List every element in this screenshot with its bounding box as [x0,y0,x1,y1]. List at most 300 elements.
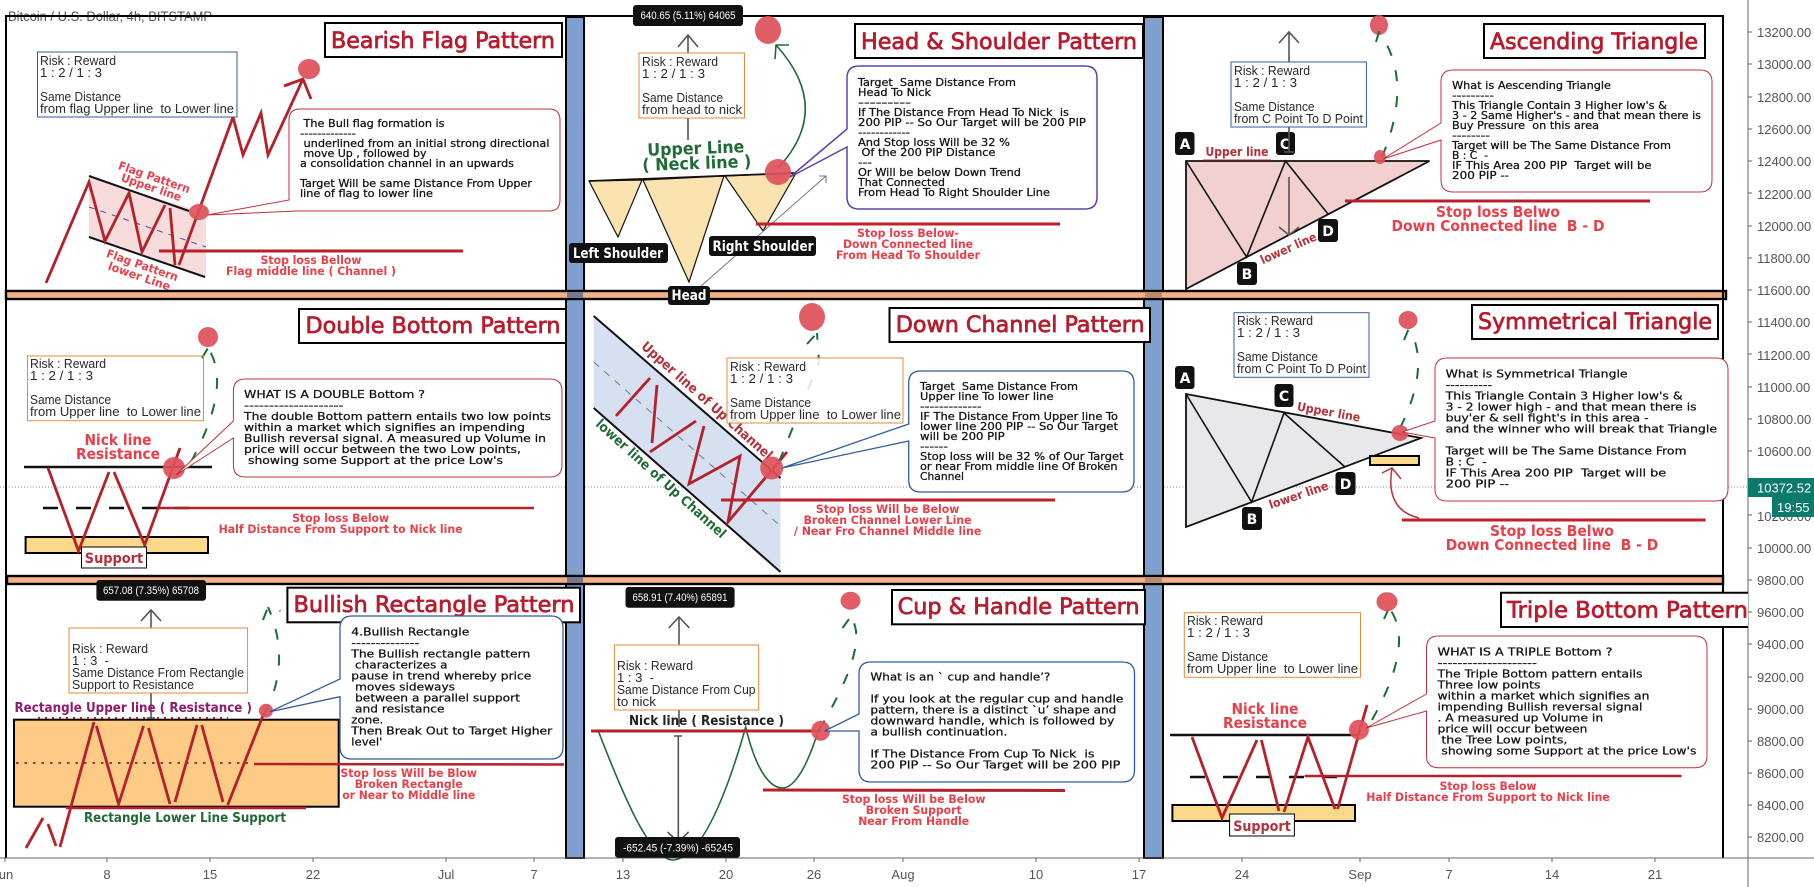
callout [824,662,1134,782]
triangle labels: Upper line [1296,399,1361,425]
stop loss [159,508,534,536]
stop loss [763,790,1065,828]
channel [594,316,780,572]
measure badge bottom [615,837,740,858]
support label: Support [85,551,144,567]
panel: head and shoulder pattern [569,5,1143,305]
time axis: 21 [1648,867,1662,882]
callout: lower line 200 PIP -- So Our Target [920,421,1118,433]
risk reward box: Risk : Reward [72,641,148,656]
triangle labels: Upper line [1206,145,1268,159]
callout: If The Distance From Head To Nick is [858,107,1069,119]
time axis: 15 [203,867,217,882]
callout: ------------- [300,128,356,140]
nick line label: Nick line [1232,700,1298,718]
callout [1366,636,1707,768]
price axis: 9400.00 [1757,637,1804,652]
risk reward box: to nick [617,694,657,709]
point badges: B [1242,267,1252,283]
price axis: 9600.00 [1757,605,1804,620]
callout: The Bull flag formation is [302,118,444,130]
target marker [298,59,320,79]
grey trend arrow [700,176,826,287]
nick line label: Nick line [84,431,152,449]
callout: ---------- [1446,378,1492,392]
risk reward box: Same Distance [642,90,723,105]
time axis: Aug [891,867,915,882]
callout: This Triangle Contain 3 Higher low's & [1451,100,1667,112]
callout: a consolidation channel in an upwards [300,158,514,170]
support label [1230,814,1294,836]
panel: cup and handle pattern [591,587,1145,860]
dashed target arrow [819,617,861,730]
title: Down Channel Pattern [896,312,1145,338]
current price label [1748,478,1814,517]
stop loss: Down Connected line [843,237,973,251]
risk reward box: from C Point To D Point [1234,111,1363,126]
risk reward box: Risk : Reward [1237,313,1313,328]
risk reward box [1234,313,1369,377]
callout: between a parallel support [355,692,521,704]
support box [1370,456,1419,465]
callout: 200 PIP -- [1446,478,1509,490]
price axis: 9000.00 [1757,702,1804,717]
dashed target arrow [779,333,827,462]
callout: ------------- [920,401,982,413]
price path [1192,705,1367,818]
breakout marker [1349,720,1369,740]
title: Symmetrical Triangle [1478,309,1712,335]
channel labels: Upper line [119,170,184,204]
callout: IF This Area 200 PIP Target will be [1452,160,1652,172]
point badges [1175,366,1356,530]
price path [616,378,787,522]
callout: 200 PIP -- So Our Target will be 200 PIP [858,117,1086,129]
callout: IF The Distance From Upper line To [920,411,1118,423]
time axis [0,858,1662,882]
risk reward box: 1 : 3 - [72,653,109,668]
target marker [1370,15,1388,35]
time axis: Sep [1348,867,1372,882]
time axis: 7 [530,867,538,882]
shoulder labels [569,236,816,305]
callout: The Triple Bottom pattern entails [1436,668,1643,680]
callout: --------- [858,97,911,109]
price axis: 12600.00 [1757,122,1811,137]
callout: showing some Support at the price Low's [248,454,503,467]
risk reward box: Risk : Reward [642,54,718,69]
stop loss: Stop loss Below- [857,226,959,240]
callout: 200 PIP -- So Our Target will be 200 PIP [870,758,1121,772]
red curved arrow [1382,468,1419,518]
callout: If The Distance From Cup To Nick is [870,748,1095,760]
target marker [799,303,825,331]
callout: What is Symmetrical Triangle [1446,368,1628,380]
callout: level' [351,736,382,748]
callout: -------------------- [1438,656,1537,670]
risk reward box: Risk : Reward [730,359,806,374]
measure badge [633,5,743,26]
callout [207,109,560,215]
neck line label [642,137,752,176]
risk reward box: 1 : 2 / 1 : 3 [730,371,793,386]
dashed target arrow [191,348,221,462]
support label: Support [1233,819,1291,835]
measure badge [96,580,206,601]
callout: buy'er & sell fight's in this area - [1446,412,1649,424]
breakout marker [1374,150,1386,164]
callout: downward handle, which is followed by [870,714,1115,728]
measure badge top: 658.91 (7.40%) 65891 [632,592,728,604]
triangle [1186,394,1421,527]
callout: And Stop loss Will be 32 % [858,137,1010,149]
price path [48,448,180,551]
risk reward box [1184,613,1360,677]
callout: Stop loss will be 32 % of Our Target [920,451,1124,463]
risk reward box [28,356,204,421]
callout: Target Same Distance From [919,381,1078,393]
callout: Then Break Out to Target Higher [350,724,553,738]
time axis: 22 [306,867,320,882]
stop loss: Stop loss Will be Below [842,792,986,806]
time axis: 24 [1235,867,1249,882]
nick line label [76,431,160,463]
callout: --------- [1452,90,1494,102]
point badges: A [1180,371,1191,387]
callout: ------ [920,441,948,453]
time axis: 8 [103,867,111,882]
breakout marker [259,704,273,718]
callout: or near From middle line Of Broken [920,461,1118,473]
nick line [591,730,821,732]
callout: -------------------- [244,399,344,412]
callout: Three low points [1436,678,1541,692]
callout: within a market which signifies an impending [244,421,525,434]
risk reward box: from Upper line to Lower line [730,407,901,422]
price axis: 8600.00 [1757,766,1804,781]
callout: --- [858,157,872,169]
measure badge top [626,587,735,608]
callout: If you look at the regular cup and handle [870,692,1124,706]
panel: down channel pattern [592,303,1150,572]
callout: -------- [1452,130,1490,142]
risk reward box: 1 : 2 / 1 : 3 [1237,325,1300,340]
price axis: 11600.00 [1757,283,1810,298]
risk reward box: 1 : 2 / 1 : 3 [1234,75,1297,90]
callout: 4.Bullish Rectangle [351,626,470,638]
dashed target arrow [1376,32,1397,157]
target arrow [775,45,805,167]
price axis: 10600.00 [1757,444,1811,459]
triangle labels [1267,399,1361,512]
callout: What is an ` cup and handle’? [870,670,1051,684]
risk reward box: Same Distance [30,392,111,407]
callout: -------------- [351,636,419,650]
risk reward box: from flag Upper line to Lower line [40,101,234,116]
channel labels: Flag Pattern [117,158,192,196]
callout: Target Will be same Distance From Upper [299,178,533,190]
channel labels: Upper line of Up Channel [638,339,776,463]
triangle labels: lower line [1267,479,1330,512]
nick line label: Resistance [1223,714,1307,732]
stop loss: Near From Handle [858,814,969,828]
risk reward box: Risk : Reward [40,53,116,68]
panel: triple bottom pattern [1170,592,1748,836]
callout: within a market which signifies an [1438,690,1650,702]
risk reward box: Risk : Reward [1234,63,1310,78]
stop loss [756,224,1060,262]
breakout marker [811,721,830,741]
callout: The double Bottom pattern entails two low points [243,410,551,423]
callout: ------------ [858,127,910,139]
callout [1402,358,1728,501]
risk reward box: from Upper line to Lower line [1187,661,1358,676]
risk reward box: from C Point To D Point [1237,361,1366,376]
risk reward box: Same Distance [730,395,811,410]
breakout marker [163,457,185,479]
callout: underlined from an initial strong directional [304,138,550,150]
callout: What is Aescending Triangle [1452,80,1611,92]
callout: move Up , followed by [304,148,426,160]
triangle labels: lower line [1258,230,1319,267]
callout: Buy Pressure on this area [1452,120,1599,132]
risk reward box: Risk : Reward [30,356,106,371]
target marker [1376,592,1398,611]
callout: showing some Support at the price Low's [1441,744,1697,758]
callout: Target Same Distance From [857,77,1016,89]
channel labels [105,158,192,293]
target marker [198,327,218,347]
current price label: 19:55 [1777,500,1810,515]
neck line label: Upper Line [647,137,745,161]
chart header: Bitcoin / U.S. Dollar, 4h, BITSTAMP [8,8,212,24]
risk reward box: from Upper line to Lower line [30,404,201,419]
price axis: 9800.00 [1757,573,1804,588]
callout: line of flag to lower line [300,188,433,200]
target marker [840,592,860,610]
price path arrow [46,79,311,283]
time axis: 10 [1029,867,1043,882]
price axis: 10800.00 [1757,412,1811,427]
channel labels [592,339,776,542]
stop loss: or Near to Middle line [342,788,475,802]
support zone [1172,805,1355,821]
title: Double Bottom Pattern [306,313,560,339]
flag channel [89,176,206,277]
price axis: 11800.00 [1757,251,1810,266]
callout: and resistance [355,702,445,716]
stop loss: Broken Support [866,803,962,817]
title: Bullish Rectangle Pattern [294,592,574,618]
callout: Head To Nick [858,87,932,99]
callout: B : C - [1446,456,1487,468]
neckline and half distance [24,467,212,508]
risk reward box [1231,62,1366,127]
point badges: B [1247,512,1257,528]
point badges: D [1340,477,1351,493]
stop loss [1402,520,1706,554]
callout: price will occur between the two Low points, [244,443,521,456]
dashed target arrow [1372,608,1402,720]
stop loss [721,500,1055,538]
channel labels: lower line of Up Channel [592,416,729,542]
price axis: 9200.00 [1757,670,1804,685]
point badges: A [1180,137,1191,153]
shoulder labels: Right Shoulder [712,239,814,255]
callout: will be 200 PIP [920,431,1005,443]
price axis: 11000.00 [1757,380,1810,395]
title: Bearish Flag Pattern [331,28,555,54]
callout [790,66,1097,209]
risk reward box: from head to nick [642,102,742,117]
risk reward box: 1 : 2 / 1 : 3 [40,65,102,80]
nick line label [1223,700,1307,732]
stop loss [1345,201,1650,235]
risk reward box: Same Distance From Cup [617,682,756,697]
panel: bearish flag pattern [38,23,562,293]
callout: Target will be The Same Distance From [1451,140,1671,152]
time axis: Jul [438,867,454,882]
risk reward box: Same Distance [1234,99,1314,114]
risk reward box: Same Distance [40,89,121,104]
price axis: 13000.00 [1757,57,1811,72]
price axis: 12800.00 [1757,90,1811,105]
title: Cup & Handle Pattern [898,594,1140,620]
callout: moves sideways [355,680,455,694]
stop loss: Down Connected line B - D [1392,217,1604,235]
stop loss: Half Distance From Support to Nick line [1366,790,1610,804]
callout [176,379,562,477]
callout: and the winner who will break that Triangle [1446,422,1717,436]
measure arrow [678,35,698,140]
nick line label: Nick line ( Resistance ) [629,713,784,729]
shoulder labels: Left Shoulder [573,246,663,262]
support zone [26,537,208,553]
title: Triple Bottom Pattern [1506,598,1748,624]
callout: From Head To Right Shoulder Line [858,187,1050,199]
measure badge: 640.65 (5.11%) 64065 [640,10,736,22]
dashed target arrow [1400,328,1421,428]
upper line label: Rectangle Upper line ( Resistance ) [14,701,252,716]
callout: Upper line To lower line [920,391,1054,403]
breakout marker [760,456,783,480]
panel: symmetrical triangle [1175,305,1728,554]
measure arrow [141,610,161,718]
risk reward box [38,52,237,117]
lower line label: Rectangle Lower Line Support [84,811,286,826]
stop loss: Stop loss Below [292,511,389,525]
price axis: 8400.00 [1757,798,1804,813]
stop loss: Broken Channel Lower Line [804,513,972,527]
neck line label: ( Neck line ) [642,152,752,176]
stop loss: Flag middle line ( Channel ) [226,264,396,278]
channel labels: lower Line [106,259,172,293]
callout [1383,70,1712,192]
dashed target arrow [263,607,280,715]
callout: WHAT IS A TRIPLE Bottom ? [1438,646,1613,658]
risk reward box [639,53,744,118]
callout: 3 - 2 Same Higher's - and that mean there is [1452,110,1701,122]
price axis: 11200.00 [1757,348,1810,363]
callout: pattern, there is a distinct `u’ shape and [870,704,1116,716]
callout: Of the 200 PIP Distance [862,147,996,159]
current price dotted line [0,486,1748,488]
panel: ascending triangle [1175,15,1712,289]
point badges [1175,132,1338,285]
rectangle zone [14,720,339,807]
price axis: 10000.00 [1757,541,1811,556]
callout: pause in trend whereby price [351,670,532,682]
time axis: 13 [616,867,630,882]
callout: B : C - [1452,150,1488,162]
callout: This Triangle Contain 3 Higher low's & [1444,390,1683,402]
panel: double bottom pattern [24,309,566,568]
risk reward box: 1 : 2 / 1 : 3 [642,66,705,81]
title: Head & Shoulder Pattern [861,29,1137,55]
price axis: 8800.00 [1757,734,1804,749]
point badges: C [1279,389,1289,405]
callout: a bullish continuation. [870,726,1007,738]
cup and handle curve [599,727,819,860]
price axis: 12200.00 [1757,187,1811,202]
risk reward box: Same Distance From Rectangle [72,665,244,680]
time axis: 20 [719,867,733,882]
current price label: 10372.52 [1757,480,1811,496]
stop loss: Down Connected line B - D [1446,536,1658,554]
callout: . A measured up Volume in [1438,712,1603,724]
callout: That Connected [857,177,945,189]
point badges: C [1280,137,1290,153]
stop loss: Stop loss Will be Below [816,502,960,516]
risk reward box: Support to Resistance [72,677,194,692]
stop loss [1305,776,1682,804]
risk reward box: 1 : 3 - [617,670,654,685]
breakout marker [1392,425,1408,441]
risk reward box: Risk : Reward [617,658,693,673]
price axis: 12400.00 [1757,154,1811,169]
callout: 3 - 2 lower high - and that mean there is [1446,400,1697,414]
stop loss: Stop loss Will be Blow [340,766,477,780]
risk reward box: Same Distance [1237,349,1318,364]
shoulder labels: Head [672,288,706,304]
stop loss [159,251,463,278]
time axis: 7 [1445,867,1453,882]
triangle [1186,161,1430,289]
callout: Channel [920,471,964,483]
risk reward box [614,645,759,710]
time axis: 26 [807,867,821,882]
time axis: 17 [1132,867,1146,882]
callout: IF This Area 200 PIP Target will be [1446,466,1666,480]
stop loss: Stop loss Bellow [260,253,362,267]
channel labels: Flag Pattern [105,246,180,284]
measure arrows [1279,32,1299,235]
nick line label: Resistance [76,445,160,463]
panel: bullish rectangle pattern [14,580,580,848]
measure badge: 657.08 (7.35%) 65708 [103,585,199,597]
title: Ascending Triangle [1490,29,1698,55]
risk reward box: 1 : 2 / 1 : 3 [30,368,93,383]
callout: WHAT IS A DOUBLE Bottom ? [244,388,425,401]
stop loss: Stop loss Belwo [1490,522,1614,540]
callout: Or Will be below Down Trend [858,167,1021,179]
neck line [589,173,796,181]
neckline and half distance [1170,735,1358,777]
callout: characterizes a [355,658,448,672]
price axis: 11400.00 [1757,315,1810,330]
callout [782,371,1134,492]
price axis: 12000.00 [1757,219,1811,234]
